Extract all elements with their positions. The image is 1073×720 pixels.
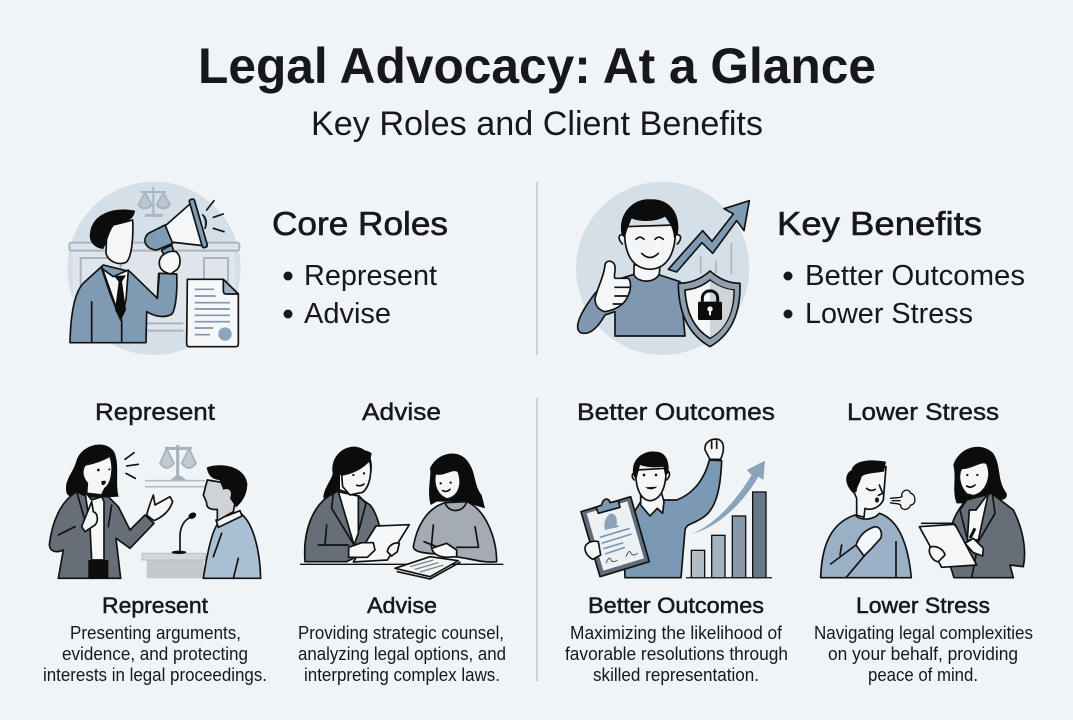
illustration: celebrating client with clipboard and bar chart	[581, 439, 772, 578]
panel: key benefits	[576, 182, 1025, 355]
description: better outcomes: skilled representation.	[593, 665, 759, 685]
celebrating man	[623, 439, 723, 578]
panel: advise	[298, 399, 506, 685]
illustration: lawyer advising a client	[300, 447, 503, 579]
illustration: relieved client and lawyer with notepad	[821, 447, 1025, 578]
subheading: represent: Represent	[102, 593, 208, 618]
subheading: better outcomes: Better Outcomes	[588, 593, 764, 618]
scales of justice	[145, 445, 205, 487]
heading: key benefits: Key Benefits	[777, 205, 982, 242]
list: key benefits: Better Outcomes	[805, 260, 1025, 292]
description: lower stress	[814, 623, 1033, 685]
description: advise: analyzing legal options, and	[298, 644, 506, 664]
heading: lower stress: Lower Stress	[847, 399, 999, 426]
icon: lawyer with megaphone in courtroom	[67, 182, 241, 355]
megaphone	[145, 199, 224, 274]
illustration: advocate speaking in court	[49, 444, 261, 578]
description: better outcomes: Maximizing the likelihood of	[570, 623, 783, 643]
title: Legal Advocacy: At a Glance	[198, 38, 876, 94]
description: lower stress: Navigating legal complexities	[814, 623, 1033, 643]
panel: better outcomes	[565, 399, 788, 685]
advisor	[305, 447, 409, 562]
icon: happy client with thumbs up, growth arrow and shield	[576, 182, 749, 355]
list: core roles	[284, 260, 437, 330]
heading: core roles: Core Roles	[272, 205, 448, 242]
description: represent: evidence, and protecting	[62, 644, 248, 664]
document with seal	[187, 279, 238, 347]
listener	[203, 465, 261, 578]
heading: better outcomes: Better Outcomes	[577, 399, 775, 426]
description: advise: Providing strategic counsel,	[298, 623, 504, 643]
description: lower stress: on your behalf, providing	[828, 644, 1018, 664]
subheading: advise: Advise	[367, 593, 437, 618]
list: key benefits: Lower Stress	[805, 298, 973, 330]
bar chart with arrow	[686, 461, 772, 578]
client	[395, 454, 497, 579]
subheading: lower stress: Lower Stress	[856, 593, 990, 618]
shield with padlock	[678, 271, 740, 347]
client	[578, 199, 685, 336]
clipboard	[581, 497, 649, 577]
subtitle: Key Roles and Client Benefits	[311, 105, 763, 143]
man in suit	[70, 209, 177, 343]
heading: advise: Advise	[362, 399, 441, 426]
microphone and podium	[142, 511, 206, 578]
description: advise: interpreting complex laws.	[304, 665, 500, 685]
panel: represent	[43, 399, 267, 685]
description: represent: interests in legal proceedings.	[43, 665, 267, 685]
list: key benefits	[784, 260, 1025, 330]
description: lower stress: peace of mind.	[868, 665, 978, 685]
description: represent	[43, 623, 267, 685]
description: advise	[298, 623, 506, 685]
description: better outcomes: favorable resolutions through	[565, 644, 788, 664]
panel: core roles	[67, 182, 448, 355]
description: better outcomes	[565, 623, 788, 685]
heading: represent: Represent	[95, 399, 215, 426]
panel: lower stress	[814, 399, 1033, 685]
description: represent: Presenting arguments,	[70, 623, 241, 643]
list: core roles: Advise	[304, 298, 391, 330]
relieved client	[821, 460, 915, 578]
list: core roles: Represent	[304, 260, 437, 292]
lawyer with notepad	[919, 447, 1025, 578]
